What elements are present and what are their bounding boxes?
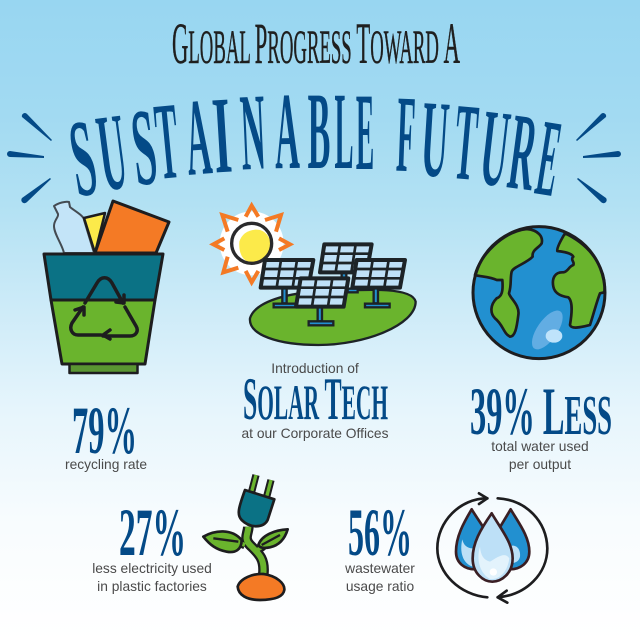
icon: plug plant [203,475,288,600]
panel: wastewater [344,493,547,603]
title: sustainable future: E [356,71,374,193]
title: sustainable future: R [502,90,544,214]
panel: water used [470,227,612,472]
icon: recycling bin [44,201,169,373]
label: at our corporate offices: at our Corporate Offices [242,426,389,441]
title: sustainable future: T [150,79,184,203]
panel: solar tech [213,206,416,441]
panel: electricity: 27% [119,494,186,570]
stat: solar tech: SOLAR TECH [243,366,388,432]
title: sustainable future: A [274,70,300,192]
title: sustainable future: B [308,70,330,192]
icon: earth globe [473,227,605,359]
title: sustainable future: U [418,77,452,201]
panel: electricity [92,475,288,600]
heading: global progress toward a: GLOBAL PROGRESS TOWARD A [172,11,460,76]
label: total water used per output: per output [509,457,571,472]
title: sustainable future: S [126,85,162,209]
decorative burst: right [576,113,621,203]
title: sustainable future: A [181,75,215,199]
title: sustainable future: U [91,90,133,214]
decorative burst: left [7,113,52,203]
label: less electricity used in plastic factories: in plastic factories [97,579,207,594]
label: wastewater usage ratio: usage ratio [346,579,414,594]
icon: water drops with cycle arrows [437,493,547,603]
label: less electricity used in plastic factories: less electricity used [92,561,212,576]
label: recycling rate: recycling rate [65,457,147,472]
title: sustainable future: I [209,74,235,196]
title: sustainable future: E [530,96,568,220]
label: wastewater usage ratio: wastewater [345,561,415,576]
title: sustainable future: T [450,80,482,204]
title: sustainable future [62,70,568,220]
title: sustainable future: F [395,73,417,195]
icon: solar panels on island with sun [213,206,416,345]
panel: wastewater: 56% [348,494,412,570]
label: total water used per output: total water used [491,439,589,454]
label: introduction of: Introduction of [271,361,359,376]
title: sustainable future: L [334,70,354,192]
title: sustainable future: N [238,71,268,193]
panel: recycling: 79% [72,392,137,468]
title: sustainable future: S [62,96,104,220]
title: sustainable future: U [475,86,515,210]
panel: recycling [44,201,169,472]
